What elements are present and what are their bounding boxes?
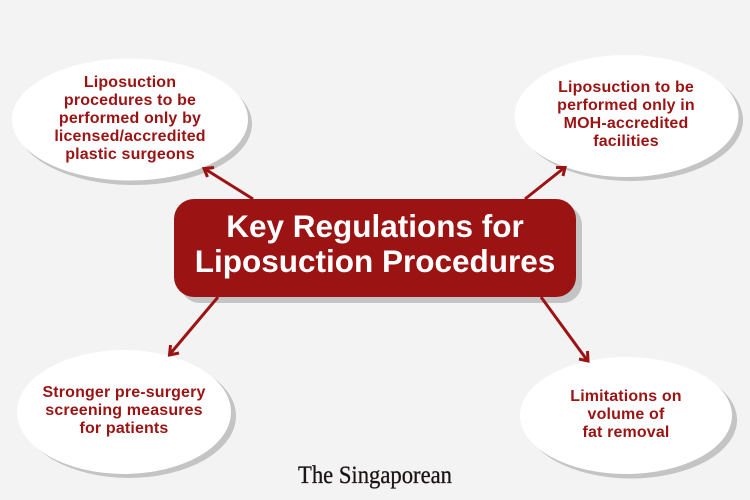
logo: The Singaporean: The Singaporean [298,462,452,489]
panel: top-left regulation oval [12,58,252,185]
panel: top-right regulation oval [514,55,743,181]
arrow: to top-left oval [204,168,253,199]
text: pre-surgery screening regulation: Stronger pre-surgery [42,384,206,401]
text: accredited facilities regulation: performed only in [557,97,695,114]
title: Key Regulations for [226,208,524,244]
text: licensed surgeons regulation: performed only by [59,110,201,127]
text: accredited facilities regulation: MOH-accredited [564,115,688,132]
title: Liposuction Procedures [195,243,555,279]
text: fat removal regulation: Limitations on [570,388,682,405]
text: pre-surgery screening regulation: for patients [80,420,168,437]
text: licensed surgeons regulation: licensed/accredited [54,128,206,145]
panel: bottom-right regulation oval [520,357,737,478]
panel: bottom-left regulation oval [17,350,236,478]
text: fat removal regulation: volume of [588,406,665,423]
central title box shadow [180,205,582,303]
arrow: to top-right oval [525,168,565,199]
arrow: to bottom-right oval [541,297,588,361]
text: pre-surgery screening regulation: screening measures [45,402,203,419]
text: accredited facilities regulation: facilities [593,133,659,150]
text: licensed surgeons regulation: procedures to be [64,92,196,109]
text: fat removal regulation: fat removal [582,424,670,441]
text: accredited facilities regulation: Liposuction to be [558,79,694,96]
arrow: to bottom-left oval [170,297,218,355]
text: licensed surgeons regulation: Liposuction [84,74,176,91]
panel: central title box [174,199,576,297]
text: licensed surgeons regulation: plastic surgeons [65,146,195,163]
